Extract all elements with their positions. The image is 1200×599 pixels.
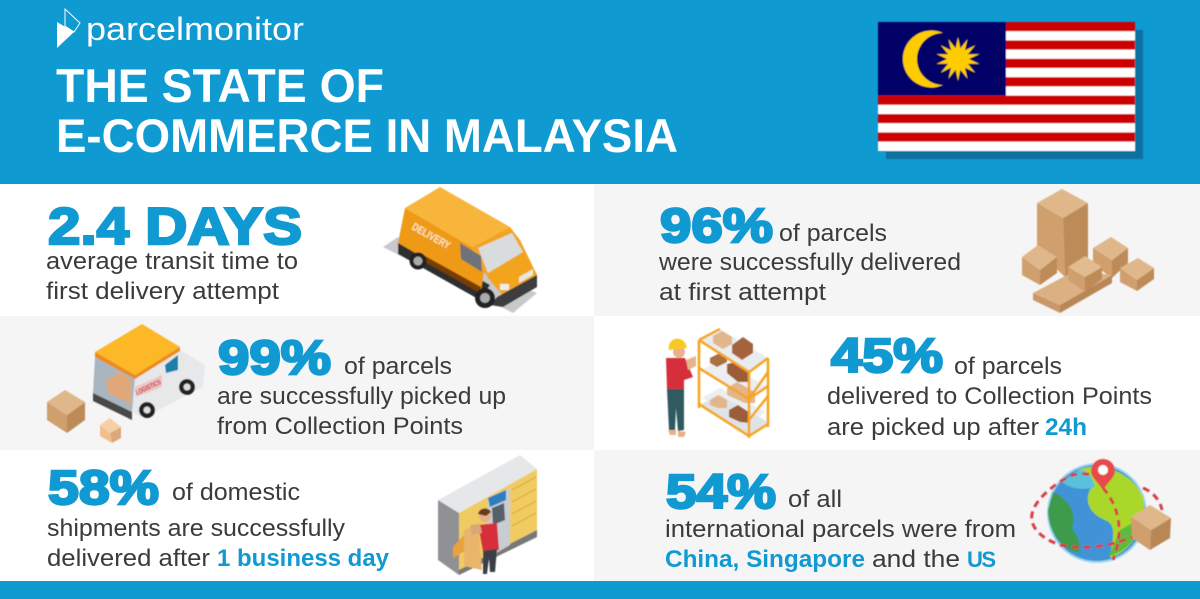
text: transit description: average transit time to bbox=[46, 248, 298, 275]
text: domestic description: of domestic bbox=[172, 479, 300, 506]
text: 24h description: of parcels bbox=[954, 353, 1062, 380]
icon: delivery van bbox=[383, 187, 537, 313]
van lettering: DELIVERY bbox=[410, 221, 453, 252]
footer band bbox=[0, 581, 1200, 599]
icon: parcel locker with customer bbox=[438, 455, 537, 575]
text: international description: and the bbox=[872, 546, 960, 573]
panel: collection point pick-up bbox=[0, 316, 594, 450]
stat: 54%: 54% bbox=[666, 466, 776, 519]
text: international description bbox=[665, 486, 1016, 573]
text: domestic description: shipments are successfully bbox=[47, 515, 345, 542]
text: international description: US bbox=[967, 547, 996, 572]
text: international description: of all bbox=[788, 486, 842, 513]
text: first attempt description: were successfully delivered bbox=[658, 249, 961, 276]
text: 24h description: 24h bbox=[1045, 414, 1087, 441]
stat: 58%: 58% bbox=[48, 462, 159, 515]
text: 24h description: delivered to Collection Points bbox=[827, 383, 1152, 410]
text: pick-up description: from Collection Points bbox=[217, 413, 463, 440]
header band bbox=[56, 9, 1143, 162]
text: domestic description: delivered after bbox=[47, 545, 210, 572]
text: transit description: first delivery attempt bbox=[46, 278, 279, 305]
icon: stack of boxes bbox=[1022, 189, 1154, 313]
text: international description: international parcels were from bbox=[665, 516, 1016, 543]
text: first attempt description bbox=[658, 220, 961, 306]
text: international description: China, Singapore bbox=[665, 546, 865, 573]
panel: first attempt bbox=[594, 184, 1200, 316]
text: first attempt description: at first attempt bbox=[659, 279, 826, 306]
icon: logistics truck with boxes bbox=[47, 324, 205, 443]
stat: 2.4 days: 2.4 DAYS bbox=[48, 198, 302, 256]
text: domestic description bbox=[47, 479, 390, 572]
text: pick-up description: of parcels bbox=[344, 353, 452, 380]
icon: worker at warehouse shelf bbox=[666, 329, 768, 438]
title: THE STATE OF bbox=[56, 59, 384, 112]
text: pick-up description bbox=[217, 353, 506, 440]
text: transit description bbox=[46, 248, 298, 305]
stat: 45%: 45% bbox=[831, 330, 943, 383]
panel: international parcels bbox=[594, 450, 1200, 581]
panel: pick-up after 24h bbox=[594, 316, 1200, 450]
stat: 99%: 99% bbox=[218, 332, 331, 385]
icon: globe with route and parcel bbox=[1032, 459, 1171, 562]
panel: domestic shipments bbox=[0, 450, 594, 581]
text: first attempt description: of parcels bbox=[779, 220, 887, 247]
text: 24h description: are picked up after bbox=[827, 414, 1039, 441]
stat: 96%: 96% bbox=[660, 200, 773, 253]
truck lettering: LOGISTICS bbox=[135, 379, 163, 397]
text: domestic description: 1 business day bbox=[217, 545, 390, 572]
text: 24h description bbox=[827, 353, 1152, 441]
logo: parcelmonitor: parcelmonitor bbox=[86, 11, 304, 47]
text: pick-up description: are successfully picked up bbox=[217, 383, 506, 410]
panel: transit time bbox=[0, 184, 594, 316]
title: E-COMMERCE IN MALAYSIA bbox=[56, 109, 678, 162]
icon: Malaysian flag bbox=[878, 22, 1143, 159]
title bbox=[56, 59, 678, 162]
